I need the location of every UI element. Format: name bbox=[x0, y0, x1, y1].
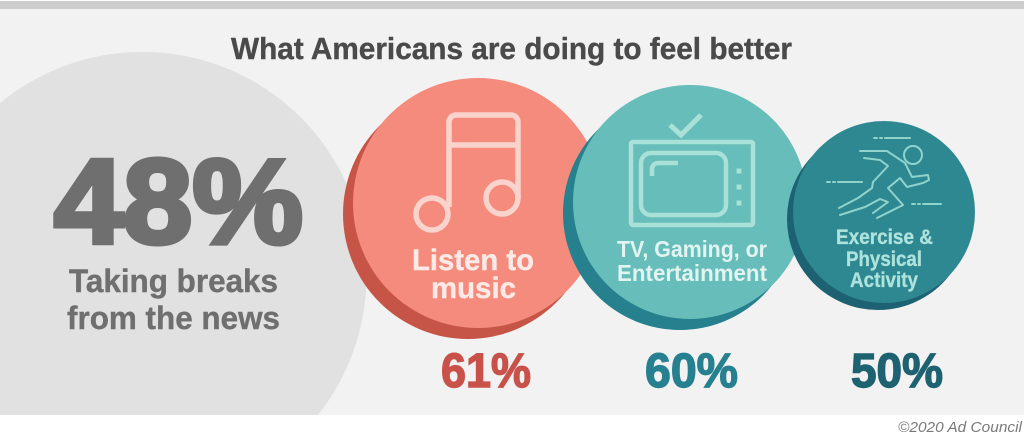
label: exercise and physical activity: Physical bbox=[846, 248, 922, 271]
icon: runner bbox=[827, 138, 941, 218]
title: What Americans are doing to feel better bbox=[231, 31, 792, 66]
stat: 61%: 61% bbox=[441, 345, 531, 398]
icon: music note bbox=[416, 115, 518, 230]
label: taking breaks from the news bbox=[67, 263, 280, 336]
label: TV, gaming, or entertainment: TV, Gaming, or bbox=[617, 236, 767, 262]
small circle shadow bbox=[787, 128, 969, 310]
top bar bbox=[0, 1, 1024, 9]
label: exercise and physical activity: Activity bbox=[850, 269, 918, 292]
label: listen to music: music bbox=[431, 272, 516, 305]
label: exercise and physical activity: Exercise & bbox=[836, 226, 933, 249]
stat: 48%: 48% bbox=[54, 135, 303, 269]
panel: TV, gaming, or entertainment bbox=[563, 85, 807, 330]
label: exercise and physical activity bbox=[836, 226, 933, 292]
label: taking breaks from the news: Taking breaks bbox=[69, 263, 278, 299]
gray circle bbox=[0, 52, 366, 415]
stat: 50%: 50% bbox=[851, 345, 943, 398]
label: taking breaks from the news: from the news bbox=[67, 300, 280, 336]
teal circle bbox=[573, 85, 807, 319]
icon: television bbox=[631, 115, 753, 225]
panel: exercise and physical activity bbox=[787, 121, 975, 310]
small circle bbox=[793, 121, 975, 303]
teal circle shadow bbox=[563, 96, 797, 330]
red circle shadow bbox=[343, 89, 593, 339]
label: listen to music bbox=[412, 244, 534, 305]
panel: 48% taking breaks from the news bbox=[0, 52, 366, 415]
copyright: ©2020 Ad Council bbox=[898, 420, 1023, 436]
label: listen to music: Listen to bbox=[412, 244, 534, 277]
red circle bbox=[353, 78, 603, 328]
label: TV, gaming, or entertainment bbox=[617, 236, 767, 286]
stat: 60%: 60% bbox=[645, 345, 738, 398]
panel: listen to music bbox=[343, 78, 603, 339]
label: TV, gaming, or entertainment: Entertainment bbox=[617, 260, 767, 286]
